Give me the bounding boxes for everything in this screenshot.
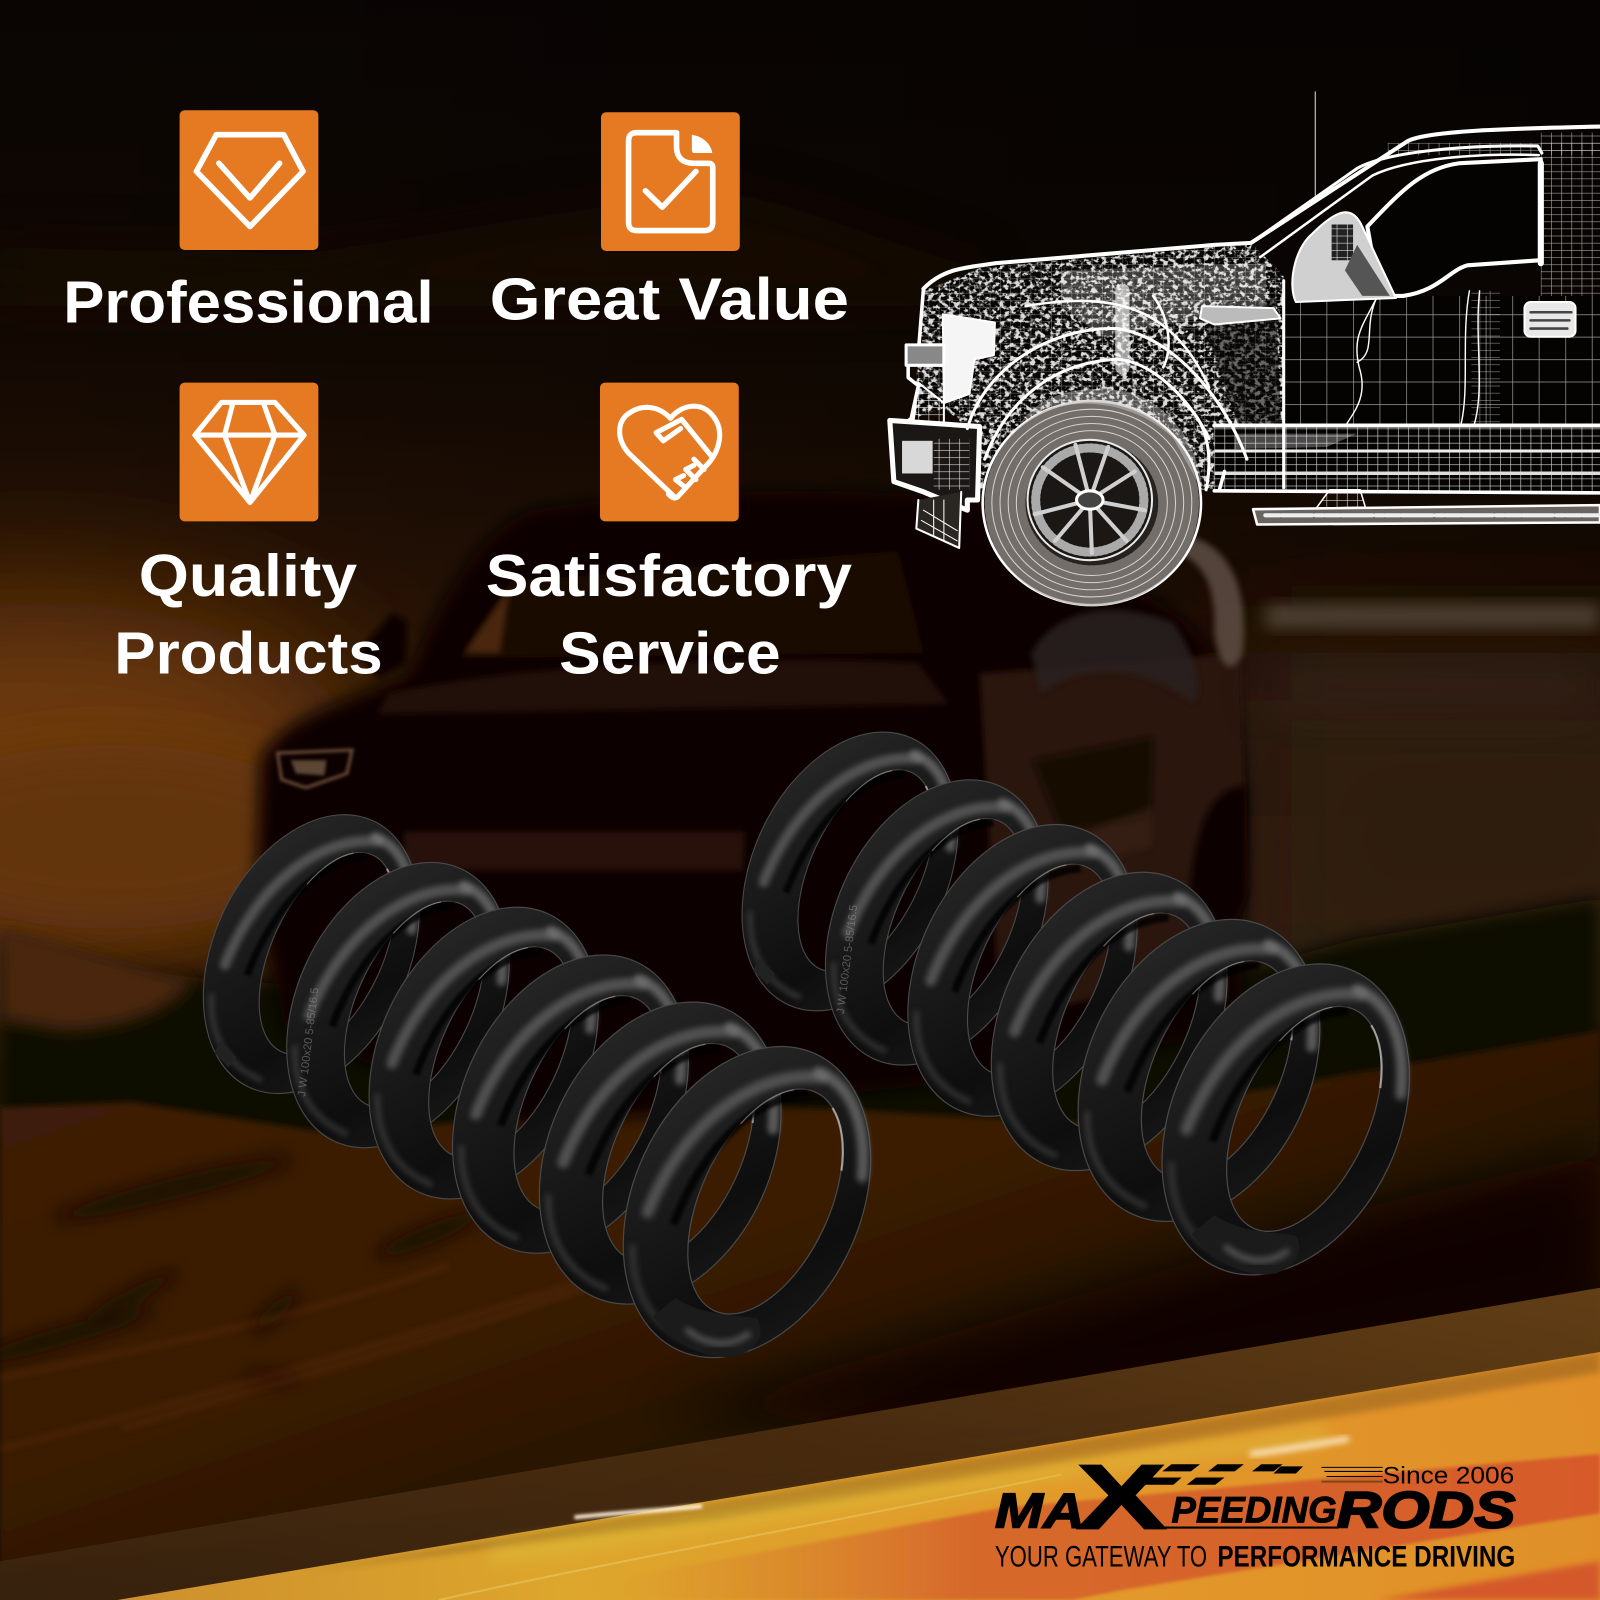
logo wordmark: MA	[995, 1485, 1085, 1539]
icon: gem chevron on orange square	[180, 110, 318, 250]
heading: Quality Products: Products	[114, 619, 383, 686]
truck body mesh	[915, 245, 1284, 490]
icon: document check on orange square	[601, 112, 740, 251]
side window	[1367, 159, 1541, 296]
coil spring: rear	[700, 697, 1457, 1315]
logo: maXpeedingRODS	[995, 1447, 1515, 1573]
heading: Professional: Professional	[63, 268, 434, 335]
door handle	[1524, 302, 1576, 337]
coil spring: front	[161, 780, 919, 1398]
running board	[1214, 471, 1600, 493]
orange speed stripe	[0, 1288, 1600, 1600]
truck tire reflection	[1031, 536, 1600, 714]
heading: Great Value: Great Value	[490, 265, 849, 332]
heading: Quality Products: Quality	[139, 542, 357, 609]
door grid	[1284, 296, 1600, 426]
background truck silhouette	[255, 491, 1247, 1128]
wireframe truck	[890, 92, 1600, 605]
cab roof mesh	[1541, 133, 1600, 296]
feature card: Professional	[63, 110, 434, 335]
logo since date: Since 2006	[1383, 1463, 1514, 1490]
icon: diamond on orange square	[180, 383, 318, 521]
heading: Satisfactory Service: Satisfactory	[486, 542, 852, 609]
logo tagline: YOUR GATEWAY TO	[995, 1540, 1207, 1573]
logo checkered flag	[1143, 1464, 1303, 1485]
logo: maXpeedingRODS: PEEDING	[1171, 1489, 1337, 1530]
door mirror	[1200, 306, 1281, 324]
front wheel	[983, 389, 1209, 605]
feature card: Great Value	[490, 112, 849, 332]
logo: maXpeedingRODS: PERFORMANCE DRIVING	[1217, 1540, 1515, 1573]
fender arches	[967, 328, 1247, 459]
logo speed lines	[1321, 1467, 1383, 1477]
logo: maXpeedingRODS: RODS	[1337, 1482, 1515, 1539]
rocker panel mesh	[1214, 426, 1600, 491]
truck outline	[923, 127, 1600, 289]
icon: heart handshake on orange square	[600, 383, 739, 521]
headlight and bumper	[943, 314, 995, 403]
feature card: Quality Products	[114, 383, 383, 686]
feature card: Satisfactory Service	[486, 383, 852, 686]
heading: Satisfactory Service: Service	[559, 619, 781, 686]
antenna	[1314, 92, 1316, 196]
logo: maXpeedingRODS: X	[1077, 1447, 1166, 1549]
